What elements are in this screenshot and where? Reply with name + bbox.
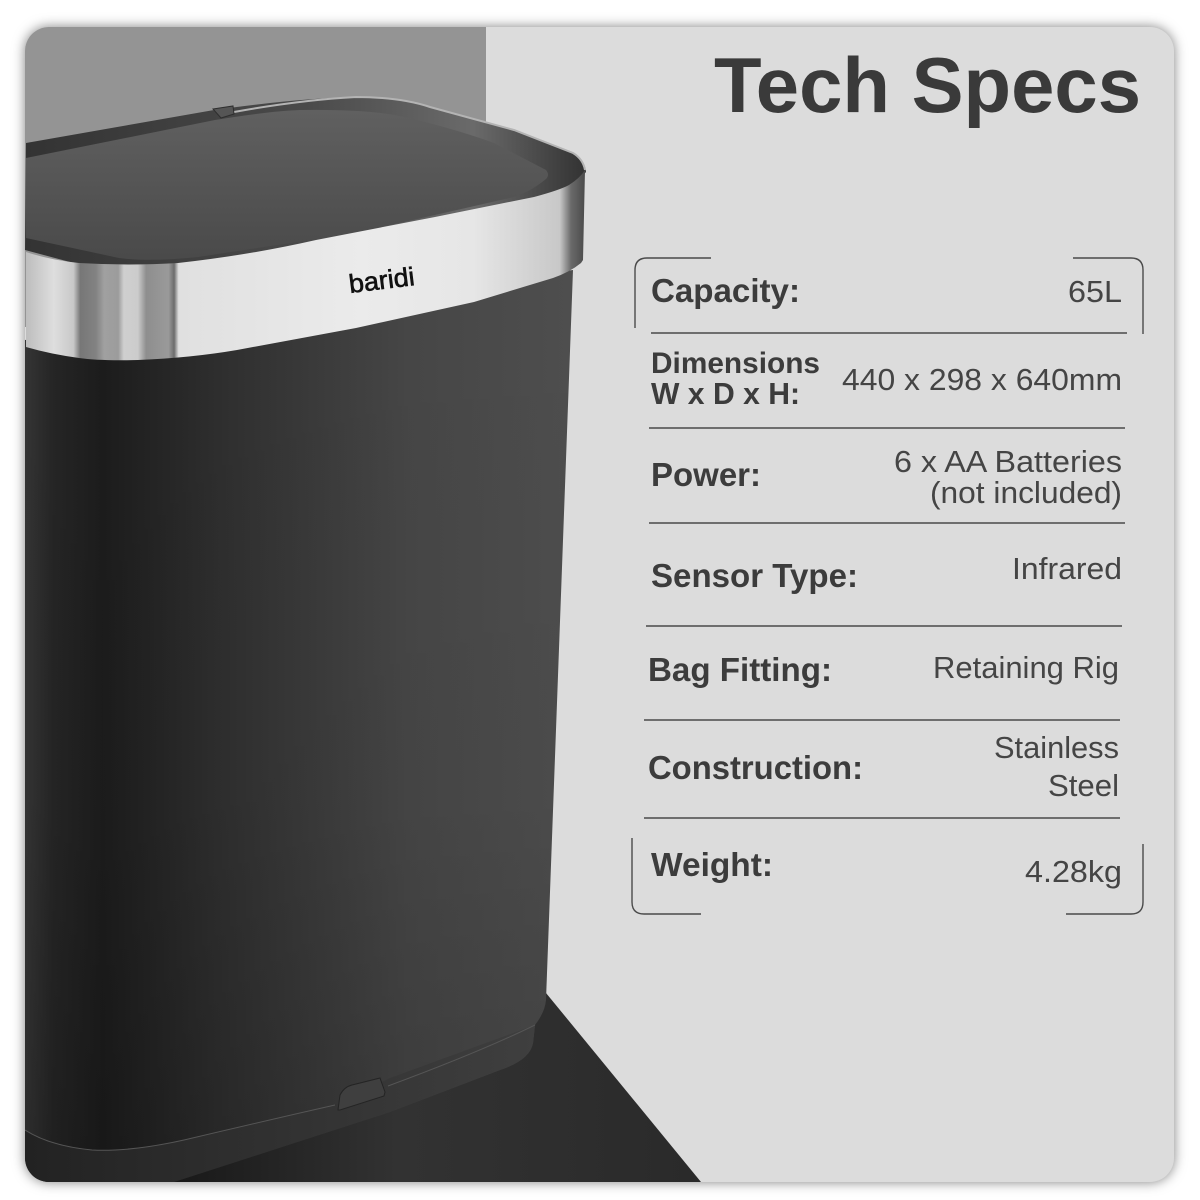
row: capacity <box>651 272 1122 309</box>
row: bag fitting: Bag Fitting: <box>648 651 832 688</box>
row: weight: 4.28kg <box>1025 854 1122 889</box>
row: dimensions: Dimensions <box>651 347 820 380</box>
bracket: top <box>635 258 1143 334</box>
lid rim <box>25 97 586 270</box>
row: power: Power: <box>651 456 761 493</box>
row: construction: Stainless <box>994 730 1119 765</box>
bin base <box>25 1131 189 1182</box>
row: bag fitting <box>648 650 1119 688</box>
bracket: bottom <box>632 838 1143 914</box>
row: bag fitting: Retaining Rig <box>933 650 1119 685</box>
floor shadow triangle <box>150 993 701 1182</box>
specs table <box>632 258 1143 914</box>
row: capacity: Capacity: <box>651 272 800 309</box>
row: sensor type: Infrared <box>1012 551 1122 586</box>
row: weight: Weight: <box>651 846 773 883</box>
row: dimensions: 440 x 298 x 640mm <box>842 362 1122 397</box>
foot pedal <box>338 1078 385 1110</box>
row: power: (not included) <box>930 475 1122 510</box>
title: Tech Specs <box>714 41 1141 129</box>
row: weight <box>651 846 1122 889</box>
trash bin <box>25 97 586 1182</box>
stainless steel band <box>26 170 585 360</box>
row: sensor type: Sensor Type: <box>651 557 858 594</box>
row: capacity: 65L <box>1068 274 1122 309</box>
row: construction <box>648 730 1119 803</box>
row: power: 6 x AA Batteries <box>894 444 1122 479</box>
row: construction: Construction: <box>648 749 863 786</box>
row: dimensions: W x D x H: <box>651 376 800 411</box>
brand logo: baridi <box>347 261 416 299</box>
row: construction: Steel <box>1048 768 1119 803</box>
row: power <box>651 444 1122 510</box>
row: dimensions <box>651 347 1122 411</box>
bin body <box>25 270 573 1182</box>
lid hinge notch <box>213 106 234 118</box>
panel: grey backdrop <box>25 27 486 327</box>
row: sensor type <box>651 551 1122 594</box>
lid surface <box>26 110 548 260</box>
